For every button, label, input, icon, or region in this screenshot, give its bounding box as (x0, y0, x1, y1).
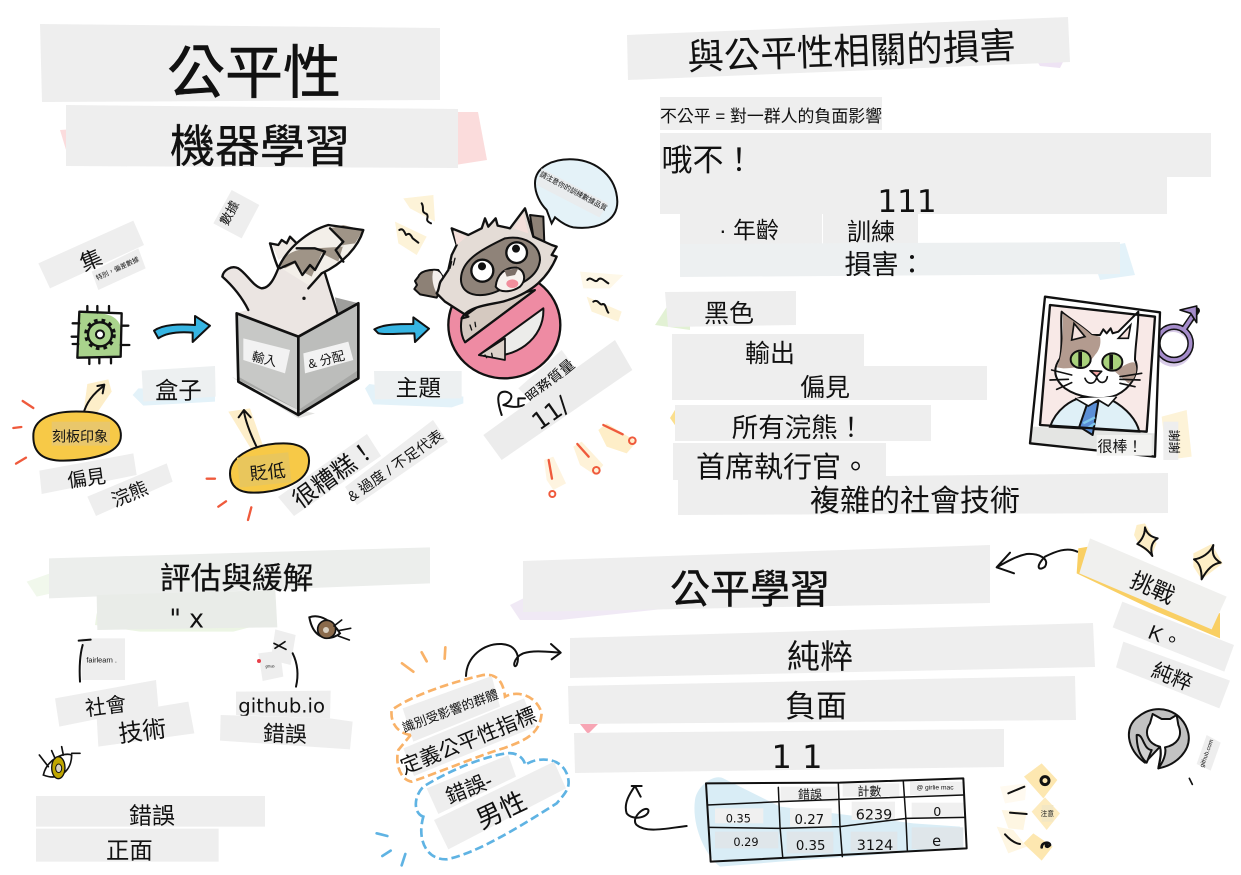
label: numbers 11 (483, 340, 632, 460)
text: training (823, 214, 918, 246)
label: social: 社會 (84, 693, 128, 721)
arrow: groups to text (466, 644, 561, 676)
heading: harms (627, 17, 1070, 80)
icon: orange dashed cloud (391, 675, 542, 782)
label: bias: 偏見 (66, 465, 107, 493)
text: bias: 偏見 (800, 374, 850, 402)
callout: stereotype (13, 379, 121, 464)
icon: brown eye (309, 616, 351, 640)
icon: blue sparks (377, 833, 405, 865)
text: pure: 純粹 (787, 638, 853, 675)
text: harms (680, 242, 1135, 280)
title: 公平性 (167, 41, 341, 106)
text: output (672, 334, 864, 368)
icon: chip with gear (72, 306, 129, 364)
callout: denigration (207, 408, 309, 520)
text: pure (570, 623, 1095, 678)
icon: x and link note: github (265, 664, 275, 668)
label: dataset (38, 221, 146, 290)
label: technical (97, 702, 194, 748)
label: technical: 技術 (117, 716, 168, 748)
label: terrible: 很糟糕！ (288, 436, 381, 514)
label: errors male (427, 755, 566, 849)
label: topic (365, 371, 463, 407)
text: oh no (660, 133, 1211, 178)
label: quality of service: 照務質量 (522, 355, 578, 407)
heading: assessment and mitigation: 評估與緩解 (160, 562, 313, 596)
callout: speech bubble (535, 159, 617, 228)
icon: orange sparks (402, 647, 445, 672)
icon: github logo (1129, 709, 1189, 768)
text: training: 訓練 (847, 219, 895, 246)
label: over and under representation: & 過度 / 不足代表 (344, 427, 447, 506)
table: fairness metrics: 錯誤 (798, 786, 822, 801)
label: fairlearn: fairlearn . (86, 656, 117, 665)
label: raccoons: 浣熊 (109, 477, 151, 511)
label: great (1097, 435, 1152, 456)
table: fairness metrics: 0 (933, 804, 941, 819)
label: dataset: 集 (76, 245, 106, 276)
banner: challenge (1077, 538, 1227, 638)
definition (660, 97, 882, 130)
table: fairness metrics: 0.27 (794, 813, 824, 828)
text: age (680, 212, 822, 248)
text: errors wide (36, 796, 265, 828)
text: 1 1: 1 1 (772, 738, 822, 776)
panel: title block (40, 24, 487, 172)
label: pure: 純粹 (1148, 659, 1195, 696)
icon: blue dashed cloud (416, 753, 569, 859)
banner: challenge: 挑戰 (1127, 567, 1179, 609)
definition: 不公平 = 對一群人的負面影響 (660, 107, 882, 126)
label: github.io: github.io (238, 695, 325, 718)
label: identify affected groups: 識別受影響的群體 (400, 686, 501, 735)
label: input (243, 338, 290, 373)
label: numbers 11: 11/ (527, 390, 575, 436)
label: K: K。 (1145, 621, 1185, 655)
label: allocation (303, 342, 353, 373)
label: data: 數據 (218, 198, 242, 228)
arrow: curl to table (626, 786, 687, 830)
panel: challenge (997, 523, 1234, 784)
text: quote x: " x (169, 603, 204, 633)
table: fairness metrics: 0.29 (733, 835, 759, 849)
label: box: 盒子 (155, 377, 202, 403)
label: social (55, 680, 158, 727)
label: dataset: 特別，偏差數據 (94, 254, 141, 282)
icon: yellow eye (39, 747, 80, 779)
heading: fair learning: 公平學習 (670, 568, 830, 612)
label: side note: 謝謝 (1167, 430, 1182, 454)
icon: male symbol (1156, 306, 1197, 364)
subtitle: 機器學習 (170, 121, 350, 172)
label: quality of service (498, 350, 578, 415)
text: 111: 111 (877, 184, 937, 220)
heading: harms: 與公平性相關的損害 (687, 25, 1016, 78)
label: data (213, 190, 259, 238)
text: errors wide: 錯誤 (129, 802, 175, 828)
text: positive (36, 829, 219, 863)
label: fairlearn (79, 638, 125, 682)
text: bias (672, 366, 987, 402)
label: errors (220, 715, 353, 749)
panel: fairness-related harms (627, 17, 1211, 518)
heading: fair learning (510, 545, 990, 620)
icon: raccoon ban sign (414, 208, 560, 378)
arrow: challenge to heading (997, 550, 1077, 573)
text: all raccoons: 所有浣熊！ (732, 413, 864, 443)
label: pure (1116, 642, 1230, 708)
illustration: raccoon in a box (222, 225, 363, 418)
text: 1 1 (574, 724, 1004, 776)
text: positive: 正面 (106, 837, 153, 863)
label: define fairness metrics: 定義公平性指標 (397, 704, 540, 779)
subtitle (66, 105, 458, 172)
title (40, 24, 440, 106)
table: fairness metrics: @ girlie mac (916, 784, 954, 791)
text: all raccoons (670, 405, 931, 443)
table: fairness metrics: e (932, 833, 941, 850)
icon: squiggles (395, 195, 623, 322)
arrow: chip to box (154, 316, 210, 342)
label: topic: 主題 (396, 375, 441, 401)
label: errors: 錯誤 (263, 721, 307, 747)
label: great: 很棒！ (1098, 439, 1142, 456)
text: black: 黑色 (704, 300, 754, 328)
label: errors male: 錯誤- (443, 769, 496, 809)
text: negative (568, 676, 1076, 724)
text: age: · 年齡 (719, 217, 779, 243)
label: K (1113, 602, 1234, 672)
panel: fair learning (377, 545, 1095, 867)
table: fairness metrics: 計數 (857, 784, 881, 799)
icon: x and link note (257, 629, 297, 687)
icon: cat portrait (1030, 297, 1160, 457)
callout: stereotype: 刻板印象 (52, 429, 108, 445)
table: fairness metrics: 6239 (856, 807, 892, 823)
text: negative: 負面 (785, 689, 847, 724)
text: black (655, 291, 796, 330)
table: fairness metrics (694, 777, 967, 867)
label: input: 輸入 (250, 349, 279, 369)
label: side note (1162, 410, 1192, 460)
label: bias (39, 453, 137, 494)
callout: denigration: 貶低 (249, 461, 287, 484)
text: oh no: 哦不！ (662, 143, 754, 178)
text: quote x (97, 590, 277, 633)
table: fairness metrics: 3124 (857, 838, 893, 854)
label: box (133, 366, 216, 406)
label: raccoons (87, 463, 173, 516)
label: github note (1189, 735, 1221, 784)
table: fairness metrics: 0.35 (726, 811, 751, 825)
label: errors male: 男性 (471, 786, 531, 835)
label: github note: github.com (1200, 739, 1215, 768)
icon: exclamation marks (544, 423, 637, 497)
heading: assessment and mitigation (27, 547, 430, 632)
text: sociotechnical (678, 473, 1168, 518)
panel: assessment and mitigation (27, 547, 430, 863)
icon: yellow marks (997, 763, 1060, 861)
callout: speech bubble: 請注意你的訓練數據品質 (538, 170, 609, 213)
text: CEO (673, 443, 886, 484)
text: CEO: 首席執行官。 (696, 451, 870, 484)
icon: sparkles (1134, 523, 1223, 579)
table: fairness metrics: 0.35 (796, 839, 826, 854)
icon: yellow marks: 注意 (1041, 809, 1054, 818)
label: allocation: & 分配 (307, 349, 346, 371)
panel: machine learning pipeline (13, 159, 637, 520)
text: harms: 損害： (844, 250, 926, 280)
arrow: box to topic (374, 317, 429, 342)
text: output: 輸出 (745, 340, 795, 368)
text: 111 (660, 177, 1167, 220)
text: sociotechnical: 複雜的社會技術 (810, 485, 1020, 518)
